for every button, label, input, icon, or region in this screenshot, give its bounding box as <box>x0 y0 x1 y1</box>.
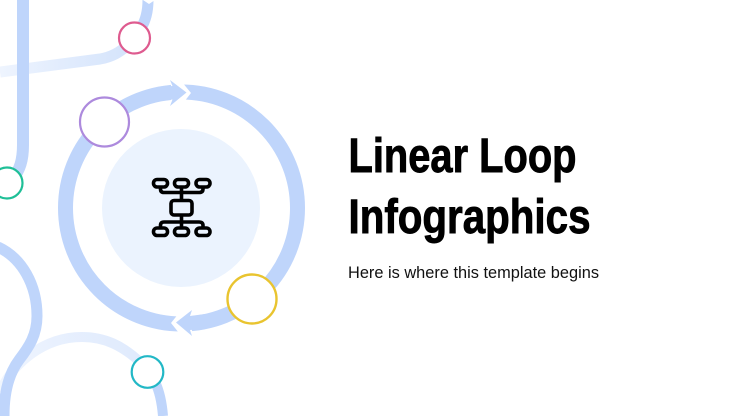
title: Infographics <box>348 191 590 244</box>
node: green <box>0 168 22 198</box>
arrow head: top <box>160 80 186 106</box>
line: lower arc to bottom edge <box>155 382 163 416</box>
ring: circular band <box>66 92 298 324</box>
node: pink <box>119 22 150 54</box>
node: purple <box>80 98 129 146</box>
icon: hierarchy <box>154 180 210 236</box>
line: left curve <box>0 247 37 416</box>
background connector lines <box>0 0 163 416</box>
arrow head: bottom <box>176 310 205 336</box>
node: teal <box>132 356 163 388</box>
node: yellow <box>228 274 276 324</box>
loop ring <box>66 76 298 340</box>
icon: white notch at top <box>143 0 155 4</box>
arrow gap: top <box>171 76 191 108</box>
line: vertical connector to green node <box>12 0 23 180</box>
arrow gap: bottom <box>171 306 192 340</box>
line: connector above pink node <box>141 0 148 28</box>
line: light lower arc <box>0 337 140 392</box>
line: light horizontal connector <box>0 45 128 72</box>
subtitle: Here is where this template begins <box>348 264 599 282</box>
title <box>348 130 590 244</box>
center disc <box>102 129 260 287</box>
title: Linear Loop <box>348 130 576 183</box>
